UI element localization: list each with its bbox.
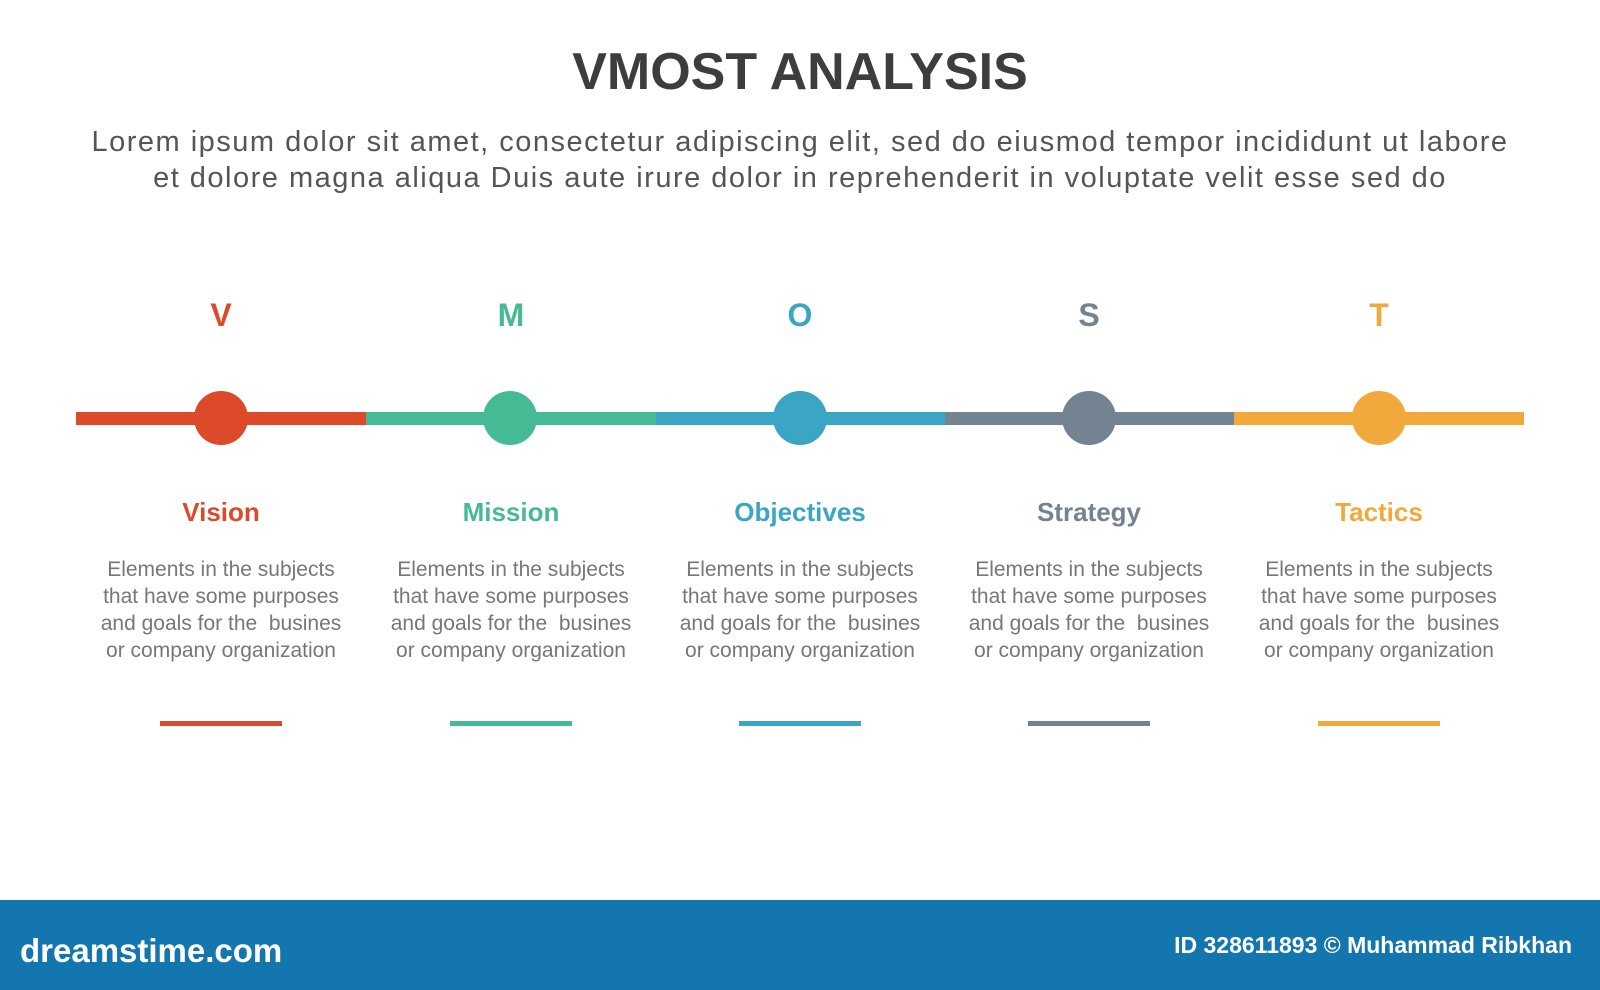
panel: strategy: S: [1078, 297, 1100, 333]
footer credit: ID 328611893 © Muhammad Ribkhan: [1174, 932, 1572, 958]
timeline: [76, 391, 1524, 445]
panel: tactics: or company organization: [1264, 639, 1494, 662]
panel: vision: and goals for the busines: [101, 612, 341, 635]
panel: tactics: Tactics: [1335, 497, 1423, 527]
panel: vision: or company organization: [106, 639, 336, 662]
panel: vision: [101, 297, 341, 726]
panel: tactics: that have some purposes: [1261, 585, 1497, 608]
footer logo: dreamstime.com: [20, 932, 282, 969]
panel: strategy: that have some purposes: [971, 585, 1207, 608]
panel: vision: that have some purposes: [103, 585, 339, 608]
panel: objectives: Elements in the subjects: [686, 558, 914, 581]
subtitle: et dolore magna aliqua Duis aute irure dolor in reprehenderit in voluptate velit esse sed do: [153, 162, 1447, 194]
panel: mission: [391, 297, 631, 726]
panel: strategy: or company organization: [974, 639, 1204, 662]
panel: vision: V: [210, 297, 232, 333]
panel: mission: that have some purposes: [393, 585, 629, 608]
panel: tactics: and goals for the busines: [1259, 612, 1499, 635]
panel: mission: or company organization: [396, 639, 626, 662]
panel: mission: M: [498, 297, 524, 333]
panel: strategy: and goals for the busines: [969, 612, 1209, 635]
panel: objectives: Objectives: [734, 497, 866, 527]
panel: tactics: [1259, 297, 1499, 726]
subtitle: Lorem ipsum dolor sit amet, consectetur adipiscing elit, sed do eiusmod tempor incididunt ut labore: [91, 126, 1509, 158]
footer bar: [0, 900, 1600, 990]
panel: tactics: Elements in the subjects: [1265, 558, 1493, 581]
panel: mission: and goals for the busines: [391, 612, 631, 635]
panel: mission: Elements in the subjects: [397, 558, 625, 581]
panel: strategy: Elements in the subjects: [975, 558, 1203, 581]
panel: objectives: [680, 297, 920, 726]
title: VMOST ANALYSIS: [572, 43, 1028, 101]
panel: objectives: or company organization: [685, 639, 915, 662]
panel: vision: Elements in the subjects: [107, 558, 335, 581]
panel: objectives: and goals for the busines: [680, 612, 920, 635]
panel: objectives: O: [788, 297, 812, 333]
panel: vision: Vision: [182, 497, 260, 527]
panel: mission: Mission: [463, 497, 559, 527]
subtitle: [91, 126, 1509, 194]
panel: strategy: [969, 297, 1209, 726]
panel: objectives: that have some purposes: [682, 585, 918, 608]
panel: strategy: Strategy: [1037, 497, 1141, 527]
panel: tactics: T: [1369, 297, 1389, 333]
